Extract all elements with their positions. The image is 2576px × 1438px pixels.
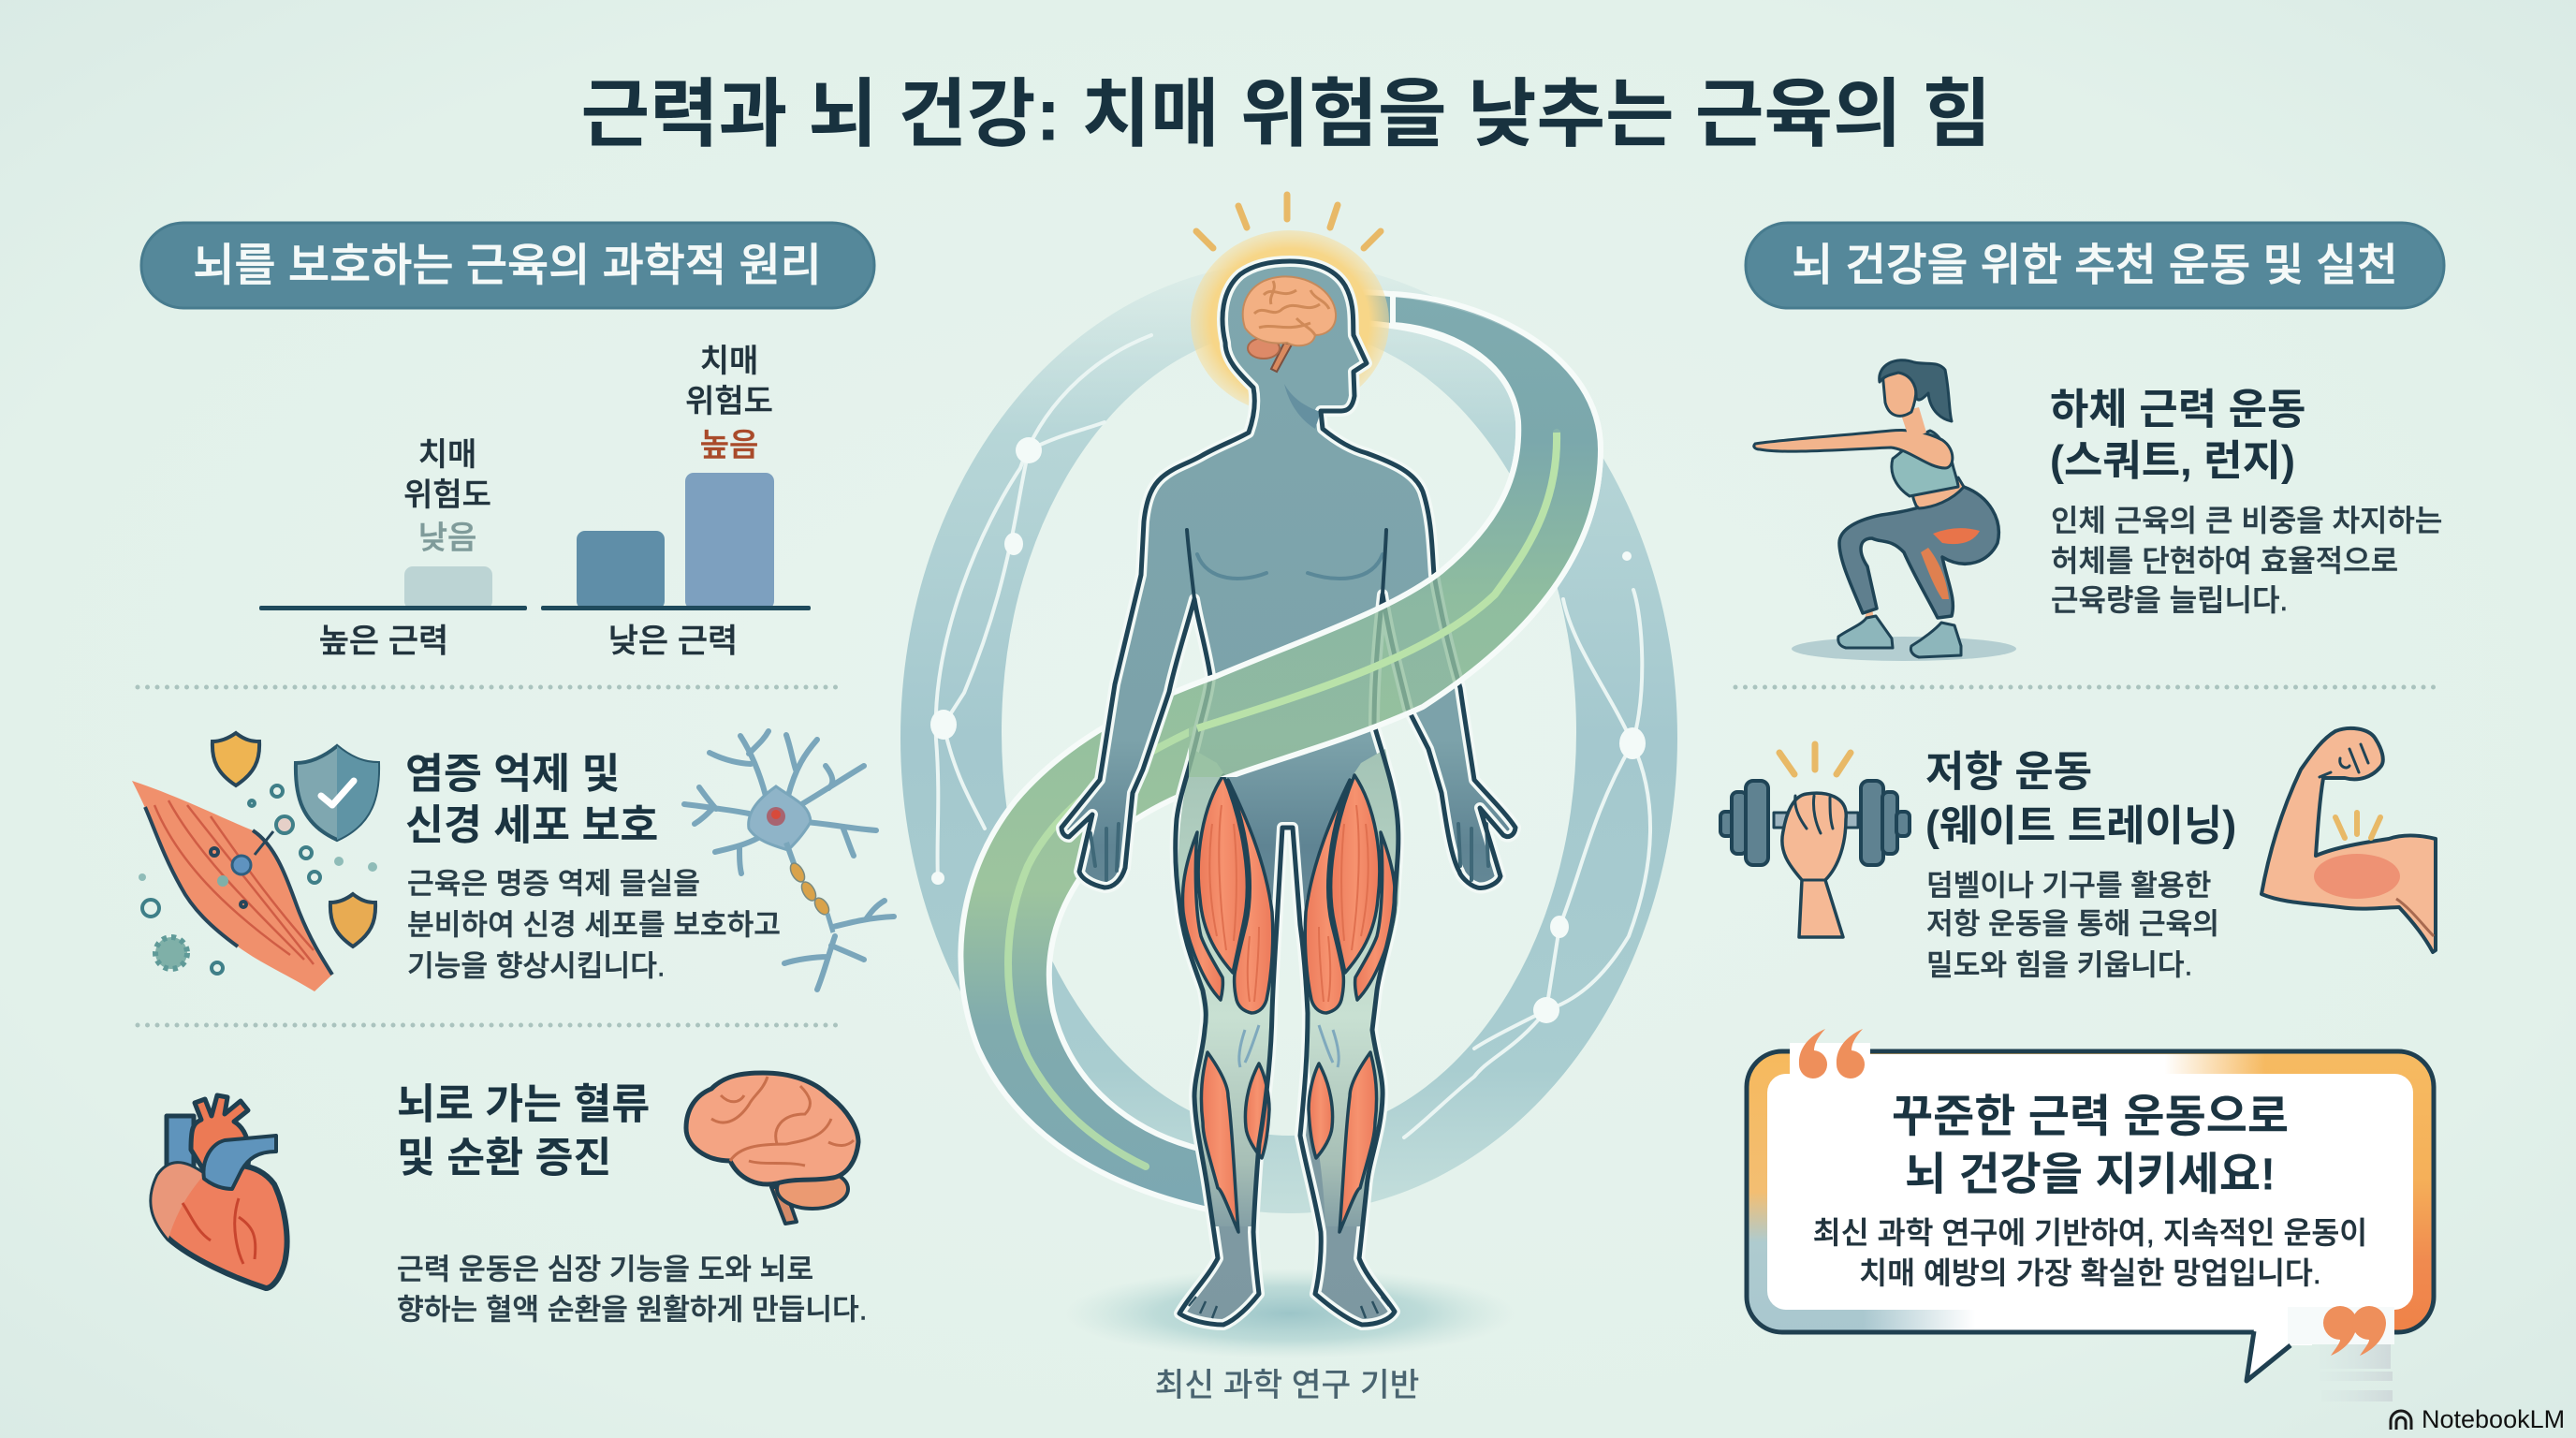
heading pill: right <box>1746 223 2444 308</box>
body text: lower body: 인체 근육의 큰 비중을 차지하는 <box>2051 504 2442 537</box>
body outline <box>1061 261 1515 1325</box>
body silhouette <box>1061 261 1515 1325</box>
icon: opening quote mark <box>1799 1029 1865 1078</box>
body text: blood flow: 향하는 혈액 순환을 원활하게 만듭니다. <box>397 1294 867 1326</box>
icon: brain <box>686 1073 858 1224</box>
label: high risk <box>685 344 773 463</box>
heading pill: left <box>141 223 874 308</box>
icon: heart <box>152 1095 287 1288</box>
halo behind head <box>1191 195 1389 414</box>
body text: resistance: 덤벨이나 기구를 활용한 <box>1926 869 2211 902</box>
heading: lower body <box>2050 386 2305 485</box>
section: resistance exercise <box>1720 728 2436 981</box>
callout speech bubble <box>1747 1043 2434 1381</box>
body text: inflammation: 분비하여 신경 세포를 보호하고 <box>407 908 781 942</box>
panel: center - body figure <box>900 195 1677 1403</box>
icon: stacked book remnant <box>2320 1344 2393 1401</box>
body text: blood flow <box>397 1253 867 1326</box>
section: blood flow and circulation <box>152 1073 867 1326</box>
caption: 최신 과학 연구 기반 <box>1155 1368 1419 1403</box>
heading: inflammation: 신경 세포 보호 <box>405 803 658 848</box>
axis label: high strength: 높은 근력 <box>319 624 448 659</box>
label: high risk: 치매 <box>700 344 758 379</box>
bar: low strength, high risk <box>685 473 774 609</box>
icon: small shield top <box>212 733 259 785</box>
icon: brain in head <box>1243 276 1336 372</box>
body text: inflammation: 기능을 향상시킵니다. <box>407 949 666 983</box>
left leg muscles <box>1178 749 1275 1318</box>
label: high risk: 위험도 <box>685 384 773 419</box>
icon: neuron <box>684 731 894 990</box>
icon: large shield with check <box>296 746 378 840</box>
body text: lower body: 근육량을 늘립니다. <box>2051 583 2288 617</box>
heading: inflammation: 염증 억제 및 <box>405 751 620 798</box>
body text: lower body: 허체를 단현하여 효율적으로 <box>2051 544 2398 578</box>
bar: low strength, first <box>577 531 665 609</box>
icon: closing quote mark <box>2323 1306 2386 1356</box>
leggings <box>1839 487 1998 618</box>
NotebookLM watermark: NotebookLM <box>2422 1405 2565 1433</box>
heading: blood flow: 및 순환 증진 <box>397 1135 611 1181</box>
callout heading: 뇌 건강을 지키세요! <box>1905 1150 2276 1200</box>
label: high risk: 높음 <box>700 428 758 463</box>
body text: inflammation <box>407 867 781 983</box>
label: low risk <box>403 437 491 556</box>
heading: resistance <box>1925 747 2236 850</box>
callout heading: 꾸준한 근력 운동으로 <box>1892 1092 2289 1142</box>
sun rays <box>1196 195 1381 248</box>
body text: resistance: 밀도와 힘을 키웁니다. <box>1926 949 2192 981</box>
heading pill: left: 뇌를 보호하는 근육의 과학적 원리 <box>193 242 822 290</box>
icon: flexed arm <box>2261 728 2436 952</box>
torso top <box>1892 431 1958 496</box>
callout body: 치매 예방의 가장 확실한 망업입니다. <box>1859 1256 2321 1290</box>
chart baselines <box>259 606 811 610</box>
icon: small shield bottom <box>330 894 375 946</box>
section: inflammation and nerve protection <box>132 731 894 991</box>
neck and head <box>1900 407 1926 440</box>
callout body <box>1813 1216 2367 1290</box>
label: low risk: 낮음 <box>418 521 476 556</box>
heading: lower body: 하체 근력 운동 <box>2050 386 2305 433</box>
title: 근력과 뇌 건강: 치매 위험을 낮추는 근육의 힘 <box>580 73 1992 155</box>
panel: right - recommended exercise <box>1720 223 2444 1401</box>
ground shadow <box>1065 1269 1515 1358</box>
heading pill: right: 뇌 건강을 위한 추천 운동 및 실천 <box>1792 242 2398 290</box>
bar: high strength, low risk <box>404 566 492 609</box>
body text: inflammation: 근육은 명증 역제 믈실을 <box>407 867 700 901</box>
body text: lower body <box>2051 504 2442 617</box>
torso details <box>1090 384 1488 880</box>
arms <box>1754 430 1953 468</box>
callout body: 최신 과학 연구에 기반하여, 지속적인 운동이 <box>1813 1216 2367 1250</box>
body figure with highlighted leg muscles <box>1061 261 1515 1325</box>
heading: lower body: (스쿼트, 런지) <box>2050 436 2295 485</box>
icon: muscle with anti-inflammatory particles <box>132 781 377 991</box>
label: low risk: 치매 <box>418 437 476 473</box>
heading: blood flow <box>397 1082 650 1181</box>
panel: left - science of muscle <box>132 223 894 1326</box>
green ribbon: back layer <box>960 292 1601 1211</box>
callout: keep up strength training <box>1747 1029 2434 1401</box>
heading: resistance: (웨이트 트레이닝) <box>1925 801 2236 850</box>
icon: woman squatting <box>1754 360 2016 661</box>
heading: resistance: 저항 운동 <box>1925 747 2092 796</box>
body text: blood flow: 근력 운동은 심장 기능을 도와 뇌로 <box>397 1253 813 1286</box>
body text: resistance: 저항 운동을 통해 근육의 <box>1926 908 2219 940</box>
heading: inflammation <box>405 751 658 848</box>
body text: resistance <box>1926 869 2219 981</box>
label: low risk: 위험도 <box>403 477 491 513</box>
decorative ring with neural network <box>900 262 1677 1213</box>
callout heading <box>1892 1092 2289 1200</box>
icon: dumbbell in hand <box>1720 744 1910 937</box>
bar chart: dementia risk by muscle strength <box>259 344 811 659</box>
section: lower body exercise <box>1754 360 2442 661</box>
axis label: low strength: 낮은 근력 <box>608 624 738 659</box>
green ribbon: translucent overlay across torso <box>1189 291 1603 777</box>
right leg muscles <box>1303 749 1399 1318</box>
heading: blood flow: 뇌로 가는 혈류 <box>397 1082 650 1127</box>
